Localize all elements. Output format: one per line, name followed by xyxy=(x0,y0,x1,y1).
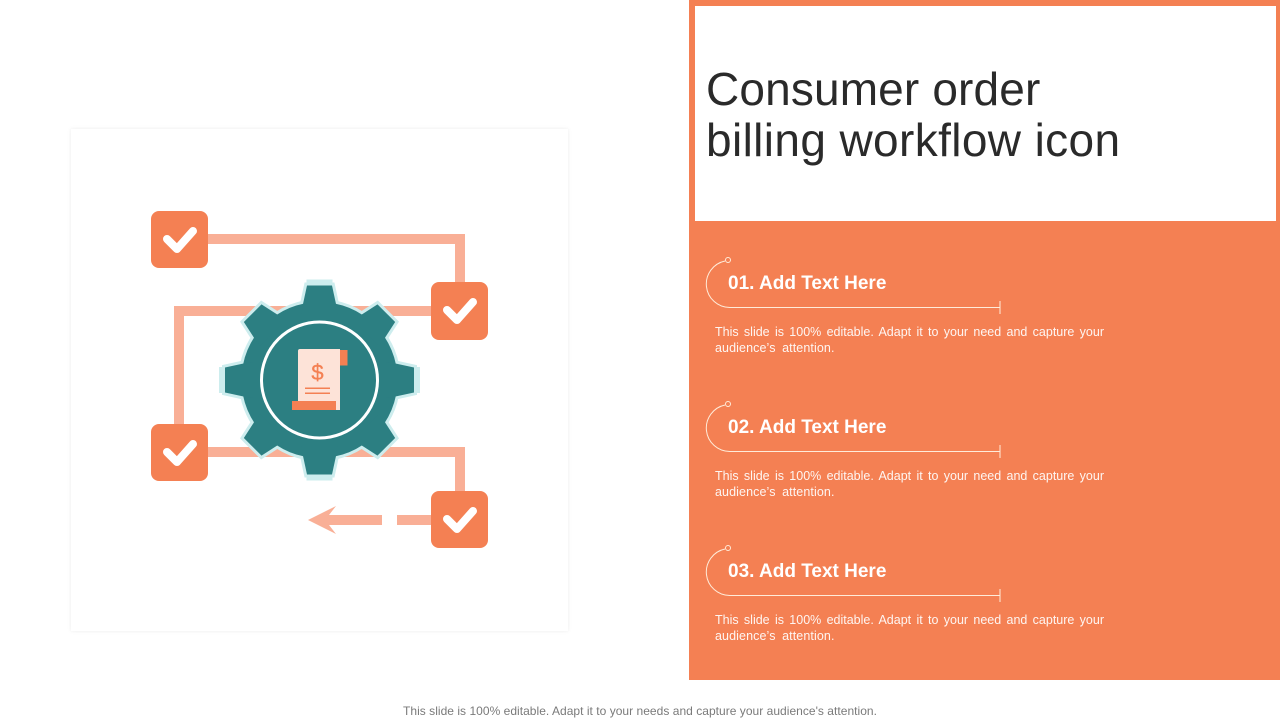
illustration card xyxy=(71,129,568,631)
icon: invoice receipt xyxy=(292,349,348,410)
title line 2: billing workflow icon xyxy=(706,114,1120,166)
orange panel xyxy=(689,0,1280,680)
item 2 heading: 02. Add Text Here xyxy=(728,417,886,438)
item 1 description: This slide is 100% editable. Adapt it to your need and capture your audience’s attention. xyxy=(715,325,1104,355)
item 3 ornament xyxy=(706,545,1000,602)
item 3 heading: 03. Add Text Here xyxy=(728,561,886,582)
icon: invoice receipt: $ xyxy=(311,360,324,385)
icon: gear xyxy=(219,280,420,480)
footer note: This slide is 100% editable. Adapt it to your needs and capture your audience's attention. xyxy=(403,704,877,718)
item 3 description: This slide is 100% editable. Adapt it to your need and capture your audience’s attention. xyxy=(715,613,1104,643)
arrow: pointing left xyxy=(308,506,382,534)
item 2 ornament xyxy=(706,401,1000,458)
item 1 ornament xyxy=(706,257,1000,314)
gear halo tips xyxy=(219,280,420,480)
checkbox 2 xyxy=(431,282,488,340)
title line 1: Consumer order xyxy=(706,63,1040,115)
item 2 description: This slide is 100% editable. Adapt it to your need and capture your audience’s attention. xyxy=(715,469,1104,499)
title box xyxy=(695,6,1276,221)
checkbox 3 xyxy=(151,424,208,481)
gear halo xyxy=(225,286,414,474)
white ring xyxy=(262,322,378,438)
checkbox 4 xyxy=(431,491,488,548)
connectors xyxy=(179,239,460,520)
workflow illustration xyxy=(151,211,488,548)
gear body xyxy=(225,286,414,474)
checkbox 1 xyxy=(151,211,208,268)
item 1 heading: 01. Add Text Here xyxy=(728,273,886,294)
